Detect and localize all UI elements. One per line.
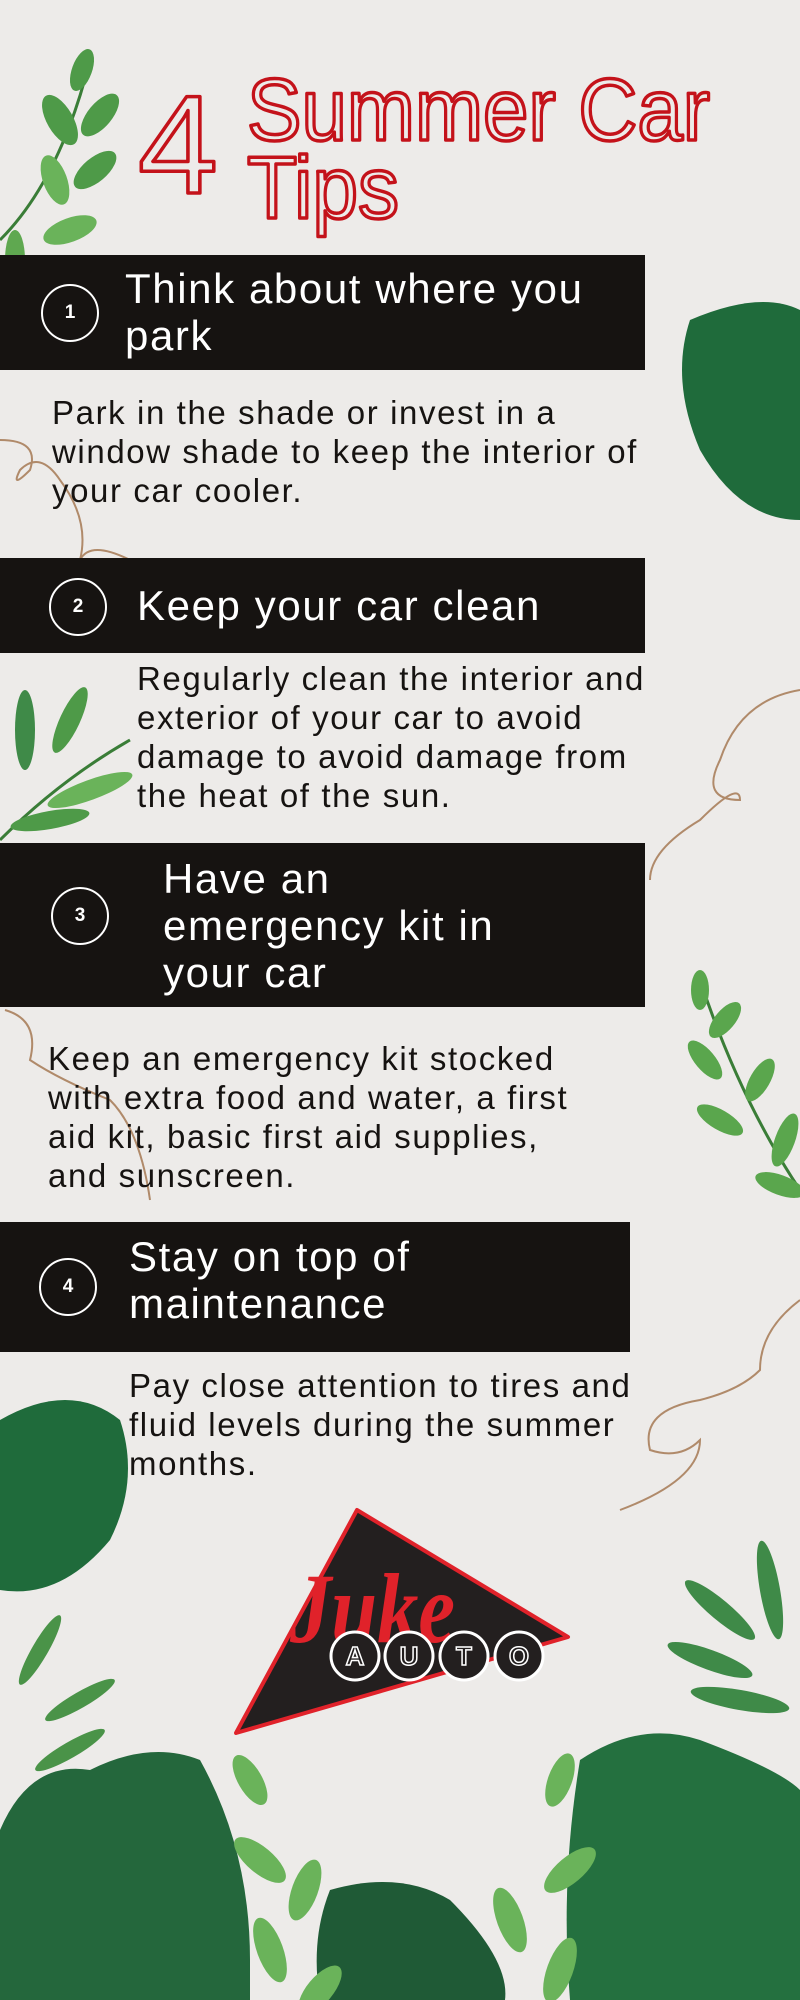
text: tip 4: months. bbox=[129, 1445, 258, 1482]
panel: tip 1 header bbox=[0, 255, 645, 370]
text: tip 2: damage to avoid damage from bbox=[137, 738, 628, 775]
text: tip 2: exterior of your car to avoid bbox=[137, 699, 583, 736]
panel: tip 2 header bbox=[0, 558, 645, 653]
text: tip 4: fluid levels during the summer bbox=[129, 1406, 615, 1443]
panel: tip 3 header bbox=[0, 843, 645, 1007]
logo: Juke Auto: T bbox=[456, 1641, 472, 1671]
heading 4: Stay on top of bbox=[129, 1233, 411, 1280]
heading 3: Have an bbox=[163, 855, 331, 902]
top-left sprig bbox=[0, 46, 126, 290]
text: tip 3: Keep an emergency kit stocked bbox=[48, 1040, 555, 1077]
text: tip 1 bbox=[52, 394, 638, 509]
logo: Juke Auto: O bbox=[509, 1641, 529, 1671]
heading 2: Keep your car clean bbox=[137, 582, 541, 629]
heading 1 bbox=[125, 265, 584, 359]
icon: number 3 bbox=[51, 887, 109, 945]
monstera left mid bbox=[0, 1400, 128, 1591]
logo: Juke Auto bbox=[234, 1508, 570, 1735]
title: 4 bbox=[138, 66, 218, 223]
logo: Juke Auto: Juke bbox=[289, 1553, 455, 1664]
heading 3: your car bbox=[163, 949, 328, 996]
right sprig mid bbox=[682, 970, 800, 1203]
text: tip 1: Park in the shade or invest in a bbox=[52, 394, 556, 431]
heading 1: Think about where you bbox=[125, 265, 584, 312]
icon: number 2: 2 bbox=[73, 596, 83, 617]
text: tip 3: with extra food and water, a first bbox=[48, 1079, 568, 1116]
text: tip 2: Regularly clean the interior and bbox=[137, 660, 645, 697]
panel: tip 4 header bbox=[0, 1222, 630, 1352]
icon: number 4: 4 bbox=[63, 1276, 73, 1297]
logo: Juke Auto: U bbox=[400, 1641, 418, 1671]
left sprig mid bbox=[0, 683, 136, 840]
icon: number 2 bbox=[49, 578, 107, 636]
text: tip 3: aid kit, basic first aid supplies, bbox=[48, 1118, 539, 1155]
icon: number 3: 3 bbox=[75, 905, 85, 926]
heading 3 bbox=[163, 855, 494, 996]
text: tip 3 bbox=[48, 1040, 568, 1194]
text: tip 2: the heat of the sun. bbox=[137, 777, 452, 814]
text: tip 4: Pay close attention to tires and bbox=[129, 1367, 631, 1404]
heading 1: park bbox=[125, 312, 213, 359]
title bbox=[138, 60, 710, 238]
monstera right 1 bbox=[682, 302, 800, 520]
text: tip 1: window shade to keep the interior of bbox=[52, 433, 638, 470]
logo: Juke Auto: A bbox=[346, 1641, 365, 1671]
heading 4 bbox=[129, 1233, 411, 1327]
icon: number 1: 1 bbox=[65, 302, 75, 323]
text: tip 2 bbox=[137, 660, 645, 814]
text: tip 3: and sunscreen. bbox=[48, 1157, 296, 1194]
title: Tips bbox=[247, 138, 399, 237]
text: tip 4 bbox=[129, 1367, 631, 1482]
icon: number 4 bbox=[39, 1258, 97, 1316]
heading 3: emergency kit in bbox=[163, 902, 494, 949]
heading 4: maintenance bbox=[129, 1280, 387, 1327]
icon: number 1 bbox=[41, 284, 99, 342]
text: tip 1: your car cooler. bbox=[52, 472, 303, 509]
